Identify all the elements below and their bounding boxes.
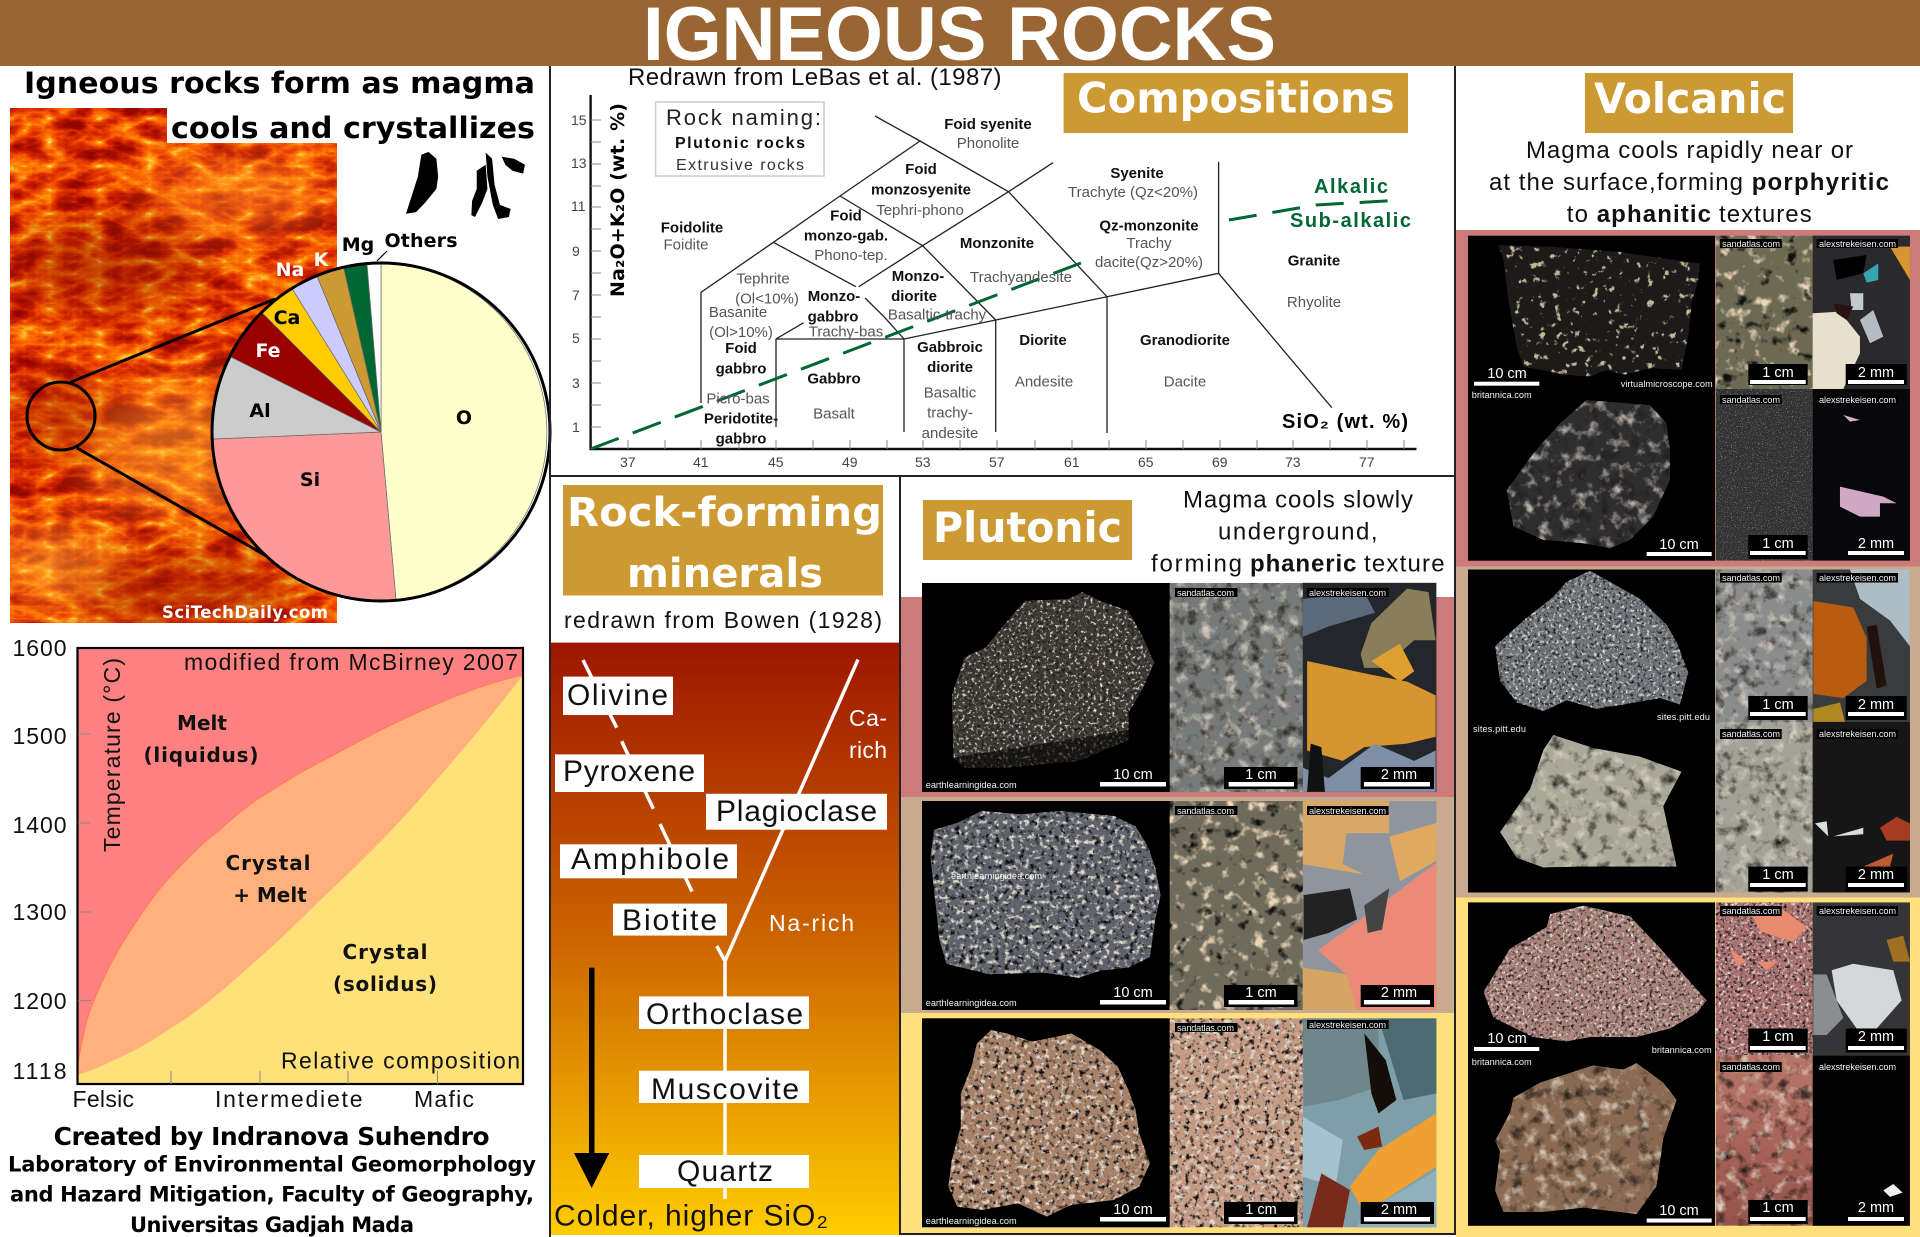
background bands (1456, 230, 1920, 1237)
rock photo: porphyritic rhyolite (1483, 905, 1707, 1041)
rock shadow (954, 730, 1129, 768)
hand sample close-up (1170, 801, 1303, 1010)
labels: plutonic fields: Gabbroic (917, 339, 983, 356)
icon: rock silhouettes (406, 152, 525, 219)
background bands (901, 597, 1454, 1234)
axis numbers: 9 (572, 243, 580, 259)
panel: rock-forming minerals (551, 485, 900, 1235)
description: volcanic: at the surface,forming (1489, 169, 1743, 196)
scale bars and sources: sandatlas.com (1722, 729, 1780, 739)
labels: plutonic fields: gabbro (716, 360, 766, 378)
scale bars and sources: 10 cm (1113, 767, 1153, 783)
scale bars and sources: 1 cm (1762, 867, 1794, 883)
y axis labels: 1300 (12, 899, 66, 925)
legend: rock naming (656, 102, 824, 176)
labels: series composition: Na-rich (769, 910, 854, 936)
rock photo: porphyritic basalt (1498, 245, 1700, 377)
region labels (144, 711, 437, 996)
pie labels: K (314, 249, 330, 271)
thin section (1303, 583, 1436, 792)
labels: plutonic fields: Granite (1288, 252, 1340, 270)
field boundaries (701, 116, 1332, 433)
axis numbers: 57 (989, 454, 1005, 470)
axis numbers: 69 (1212, 454, 1228, 470)
labels: plutonic fields: diorite (891, 288, 937, 305)
scale bars and sources: 10 cm (1113, 1202, 1153, 1218)
labels: extrusive fields: Trachy (1126, 235, 1172, 252)
axis numbers: 7 (572, 287, 580, 303)
panel: volcanic (1456, 73, 1920, 1237)
credits: and Hazard Mitigation, Faculty of Geography, (10, 1183, 534, 1207)
magnifier circle and leader lines (27, 299, 340, 594)
rock photo: aphanitic rhyolite (1495, 1063, 1677, 1214)
hand sample close-up (1170, 583, 1303, 792)
rock photo (930, 811, 1161, 978)
labels: plutonic fields: Gabbro (807, 370, 861, 388)
region labels: (solidus) (333, 972, 437, 996)
scale bars and sources: 1 cm (1245, 985, 1277, 1001)
panel: compositions TAS diagram (571, 64, 1416, 470)
axis numbers: 13 (571, 155, 587, 171)
scale bars and sources: 10 cm (1659, 1203, 1699, 1219)
axis numbers: 49 (842, 454, 858, 470)
legend: rock naming: Extrusive rocks (676, 157, 804, 174)
scale bars and sources: sandatlas.com (1722, 573, 1780, 583)
source note: redrawn from Bowen (1928) (564, 607, 882, 633)
scale bars and sources: 10 cm (1659, 537, 1699, 553)
labels: plutonic fields: monzo-gab. (804, 228, 888, 244)
scale bars and sources: alexstrekeisen.com (1309, 588, 1386, 598)
alkalic / sub-alkalic divider (591, 263, 1081, 449)
labels: extrusive fields: Basalt (813, 406, 856, 422)
description: volcanic: porphyritic (1752, 169, 1889, 196)
region labels: (liquidus) (144, 743, 258, 767)
axis numbers: 5 (572, 330, 580, 346)
scale bars and sources (926, 806, 1434, 1008)
y axis labels: 1600 (12, 635, 66, 661)
description: volcanic (1489, 137, 1889, 228)
scale bars and sources (1472, 239, 1907, 559)
scale bars and sources: 1 cm (1762, 1200, 1794, 1216)
axis numbers: 65 (1138, 454, 1154, 470)
labels: extrusive fields: Trachyte (Qz<20%) (1068, 184, 1198, 201)
caption: colder higher silica: Colder, higher SiO₂ (554, 1200, 828, 1233)
labels: extrusive fields: Picro-bas (706, 390, 770, 408)
heading: rock-forming minerals: minerals (627, 551, 823, 597)
labels: extrusive fields: Basaltic-trachy (888, 306, 987, 324)
credits: Created by Indranova Suhendro (54, 1122, 490, 1151)
close-ups (1716, 902, 1813, 1055)
labels: extrusive fields: Tephrite (736, 270, 790, 288)
scale bars and sources: 2 mm (1858, 1029, 1894, 1045)
labels: extrusive fields: dacite(Qz>20%) (1095, 254, 1203, 271)
labels: plutonic fields: Syenite (1110, 165, 1164, 182)
labels: extrusive fields: Dacite (1164, 374, 1206, 390)
description: volcanic: aphanitic (1597, 201, 1711, 228)
mineral: orthoclase: Orthoclase (646, 998, 803, 1031)
mineral: quartz (639, 1155, 809, 1188)
scale bars and sources: sandatlas.com (1177, 1023, 1234, 1033)
labels: plutonic fields: Foid (830, 208, 862, 224)
source note: modified from McBirney 2007 (184, 649, 518, 675)
thin sections (1813, 569, 1910, 892)
pie labels: O (456, 407, 472, 429)
scale bars and sources: sites.pitt.edu (1657, 712, 1710, 722)
scale bars and sources (1473, 573, 1907, 892)
header banner (0, 0, 1920, 77)
y axis labels: 1200 (12, 988, 66, 1014)
rock photo (948, 1030, 1150, 1217)
scale bars and sources: earthlearningidea.com (951, 871, 1042, 881)
row: granite (922, 1018, 1436, 1227)
labels: plutonic fields: Foid (725, 340, 757, 357)
row: basalt (1468, 236, 1910, 561)
axis numbers: 45 (768, 454, 784, 470)
labels: plutonic fields: Monzonite (960, 235, 1034, 252)
labels: extrusive fields: Phono-tep. (814, 247, 888, 264)
scale bars and sources: alexstrekeisen.com (1819, 395, 1896, 405)
scale bars and sources (1472, 906, 1907, 1224)
region labels: Melt (177, 711, 227, 735)
scale bars and sources: earthlearningidea.com (926, 780, 1017, 790)
scale bars and sources: 10 cm (1487, 366, 1527, 382)
scale bars and sources: 2 mm (1858, 867, 1894, 883)
scale bars and sources: 2 mm (1858, 1200, 1894, 1216)
heading: igneous rocks form: Igneous rocks form as magma (24, 66, 535, 100)
thin sections (1730, 902, 1910, 1226)
labels: plutonic fields: Diorite (1019, 332, 1067, 349)
scale bars and sources: alexstrekeisen.com (1819, 729, 1896, 739)
thin section (1303, 801, 1436, 1010)
mineral: muscovite: Muscovite (651, 1073, 799, 1106)
axis numbers: 11 (571, 198, 586, 214)
scale bars and sources: 1 cm (1762, 365, 1794, 381)
labels: plutonic fields: Qz-monzonite (1099, 218, 1199, 234)
labels: plutonic fields: gabbro (808, 308, 858, 326)
scale bars and sources: 1 cm (1245, 767, 1277, 783)
pie labels: Na (276, 259, 304, 281)
description: plutonic: texture (1364, 550, 1445, 577)
scale bars and sources: alexstrekeisen.com (1819, 239, 1896, 249)
thin section (1303, 1018, 1436, 1227)
mineral: amphibole: Amphibole (571, 843, 729, 876)
axis numbers: 3 (572, 375, 580, 391)
axis title: alkali: Na₂O+K₂O (wt. %) (607, 103, 629, 297)
mineral: olivine: Olivine (567, 679, 668, 712)
description: plutonic: underground, (1218, 519, 1378, 546)
labels: extrusive fields: (Ol<10%) (735, 290, 799, 308)
scale bars and sources: 2 mm (1858, 697, 1894, 713)
labels: plutonic fields: Foid (905, 161, 937, 178)
credits: Laboratory of Environmental Geomorphology (8, 1153, 536, 1177)
scale bars and sources: 2 mm (1381, 985, 1417, 1001)
scale bars and sources: earthlearningidea.com (926, 998, 1017, 1008)
phase diagram: temperature vs composition (12, 635, 523, 1112)
labels: extrusive fields: andesite (922, 425, 978, 442)
axis numbers: 53 (915, 454, 931, 470)
axis numbers: 77 (1359, 454, 1375, 470)
credits: Universitas Gadjah Mada (130, 1213, 414, 1237)
x axis labels: Felsic (72, 1086, 134, 1112)
thin sections (1813, 236, 1910, 561)
scale bars and sources: sandatlas.com (1722, 239, 1780, 249)
scale bars and sources: 10 cm (1113, 985, 1153, 1001)
labels: extrusive fields: Tephri-phono (876, 202, 964, 219)
description: plutonic (1151, 487, 1445, 577)
pie labels: Mg (342, 234, 374, 256)
scale bars and sources: sandatlas.com (1177, 588, 1234, 598)
scale bars and sources: alexstrekeisen.com (1819, 906, 1896, 916)
x axis labels: Mafic (414, 1086, 474, 1112)
axis numbers: 37 (620, 454, 636, 470)
close-ups (1716, 236, 1813, 389)
mineral: pyroxene: Pyroxene (563, 755, 695, 788)
credits (8, 1122, 536, 1237)
labels: extrusive fields: Andesite (1015, 374, 1073, 390)
y axis title: Temperature (°C) (99, 658, 125, 852)
scale bars and sources: 1 cm (1762, 697, 1794, 713)
y axis labels: 1400 (12, 812, 66, 838)
y axis labels: 1500 (12, 723, 66, 749)
axes and ticks (591, 95, 1416, 449)
scale bars and sources: britannica.com (1652, 1045, 1712, 1055)
labels: series composition: rich (849, 737, 887, 763)
scale bars and sources: alexstrekeisen.com (1309, 1020, 1386, 1030)
image: lava texture (0, 108, 337, 635)
description: volcanic: textures (1719, 201, 1812, 228)
rock photo (952, 592, 1154, 768)
scale bars and sources: alexstrekeisen.com (1819, 573, 1896, 583)
mineral: plagioclase: Plagioclase (716, 795, 877, 828)
rock photo: porphyritic andesite (1495, 571, 1688, 711)
axis numbers (571, 112, 1375, 470)
labels: series composition (769, 705, 887, 936)
mineral: biotite: Biotite (622, 904, 717, 937)
pie labels: Al (249, 400, 271, 422)
labels: extrusive fields (663, 135, 1341, 442)
labels: plutonic fields: Foid syenite (944, 116, 1032, 133)
pie chart: crust composition (212, 263, 550, 601)
labels: alkalic series: Sub-alkalic (1290, 210, 1411, 232)
heading: igneous rocks form (24, 66, 535, 145)
labels: alkalic series (1290, 176, 1411, 232)
scale bars and sources: 1 cm (1245, 1202, 1277, 1218)
gradient background (551, 643, 900, 1235)
heading: volcanic: Volcanic (1594, 74, 1786, 123)
description: volcanic: to (1567, 201, 1588, 228)
heading: compositions: Compositions (1077, 74, 1394, 123)
description: plutonic: phaneric (1250, 550, 1356, 577)
heading: rock-forming minerals: Rock-forming (567, 490, 882, 536)
close-ups (1716, 570, 1813, 722)
axis numbers: 61 (1064, 454, 1080, 470)
axis title: silica: SiO₂ (wt. %) (1282, 411, 1408, 433)
scale bars and sources: 1 cm (1762, 1029, 1794, 1045)
pie labels (249, 230, 472, 491)
labels: plutonic fields: monzosyenite (871, 182, 971, 198)
row: diorite (922, 801, 1436, 1010)
labels: plutonic fields: Granodiorite (1140, 332, 1230, 349)
scale bars and sources: sites.pitt.edu (1473, 724, 1526, 734)
y axis labels (12, 635, 66, 1084)
rock photo: aphanitic andesite (1500, 735, 1682, 867)
mineral: quartz: Quartz (677, 1155, 773, 1188)
scale bars and sources: 2 mm (1858, 365, 1894, 381)
labels: extrusive fields: trachy- (927, 404, 973, 422)
pie labels: Ca (274, 307, 300, 329)
scale bars and sources: alexstrekeisen.com (1819, 1062, 1896, 1072)
scale bars and sources (926, 588, 1434, 790)
scale bars and sources: 2 mm (1858, 536, 1894, 552)
labels: plutonic fields (661, 116, 1340, 448)
scale bars and sources: sandatlas.com (1722, 395, 1780, 405)
row: rhyolite (1468, 902, 1910, 1226)
axis numbers: 41 (693, 454, 709, 470)
row: gabbro (922, 583, 1436, 792)
scale bars and sources: virtualmicroscope.com (1621, 379, 1713, 389)
scale bars and sources: sandatlas.com (1722, 1062, 1780, 1072)
scale bars and sources: 2 mm (1381, 767, 1417, 783)
axis numbers: 1 (572, 419, 580, 435)
scale bars and sources: 2 mm (1381, 1202, 1417, 1218)
labels: plutonic fields: diorite (927, 359, 973, 376)
scale bars and sources: britannica.com (1472, 1057, 1532, 1067)
heading cut-out (167, 108, 338, 143)
continuous branch (717, 660, 858, 1199)
hand sample close-up (1170, 1018, 1303, 1227)
discontinuous branch (583, 660, 692, 892)
scale bars and sources: 10 cm (1487, 1031, 1527, 1047)
description: plutonic: forming (1151, 550, 1242, 577)
scale bars and sources: earthlearningidea.com (926, 1216, 1017, 1226)
scale bars and sources: sandatlas.com (1722, 906, 1780, 916)
region labels: Crystal (342, 940, 428, 964)
labels: series composition: Ca- (849, 705, 887, 731)
description: plutonic: Magma cools slowly (1183, 487, 1413, 514)
labels: plutonic fields: Peridotite- (704, 410, 778, 428)
labels: extrusive fields: Foidite (663, 236, 709, 254)
scale bars and sources: sandatlas.com (1177, 806, 1234, 816)
scale bars and sources (926, 1020, 1434, 1226)
labels: extrusive fields: (Ol>10%) (709, 324, 773, 341)
axis numbers: 15 (571, 112, 587, 128)
y axis labels: 1118 (12, 1058, 66, 1084)
heading: igneous rocks form: cools and crystallizes (171, 111, 535, 145)
image credit: SciTechDaily.com (162, 603, 328, 622)
labels: extrusive fields: Basaltic (924, 384, 977, 402)
scale bars and sources: britannica.com (1472, 390, 1532, 400)
scale bars and sources: 1 cm (1762, 536, 1794, 552)
legend: rock naming: Rock naming: (666, 105, 821, 130)
heading: plutonic: Plutonic (933, 503, 1122, 552)
rock photo: aphanitic basalt (1507, 400, 1670, 548)
region labels: + Melt (233, 883, 307, 907)
arrow: cooling direction (574, 968, 609, 1188)
pie labels: Si (300, 469, 320, 491)
labels: plutonic fields: Foidolite (661, 220, 723, 236)
x axis labels: Relative composition (281, 1048, 520, 1074)
labels: plutonic fields: gabbro (716, 430, 766, 448)
pie labels: Others (384, 230, 458, 252)
x axis labels: Intermediete (215, 1086, 362, 1112)
panel: plutonic (901, 487, 1454, 1234)
x axis labels (72, 1048, 520, 1112)
labels: extrusive fields: Phonolite (957, 135, 1019, 152)
labels: plutonic fields: Monzo- (808, 288, 860, 305)
labels: alkalic series: Alkalic (1314, 176, 1388, 198)
labels: extrusive fields: Trachy-bas (809, 324, 883, 340)
labels: extrusive fields: Basanite (709, 304, 767, 321)
scale bars and sources: alexstrekeisen.com (1309, 806, 1386, 816)
note: source: Redrawn from LeBas et al. (1987) (628, 64, 1002, 91)
panel: magma intro (0, 66, 550, 635)
axis numbers: 73 (1285, 454, 1301, 470)
legend: rock naming: Plutonic rocks (675, 135, 805, 152)
heading: rock-forming minerals (563, 485, 883, 597)
labels: extrusive fields: Trachyandesite (970, 269, 1072, 286)
pie labels: Fe (255, 340, 281, 362)
region labels: Crystal (226, 851, 310, 875)
row: andesite (1468, 569, 1910, 892)
labels: plutonic fields: Monzo- (892, 268, 944, 285)
labels: extrusive fields: Rhyolite (1287, 294, 1341, 311)
description: volcanic: Magma cools rapidly near or (1526, 137, 1853, 164)
